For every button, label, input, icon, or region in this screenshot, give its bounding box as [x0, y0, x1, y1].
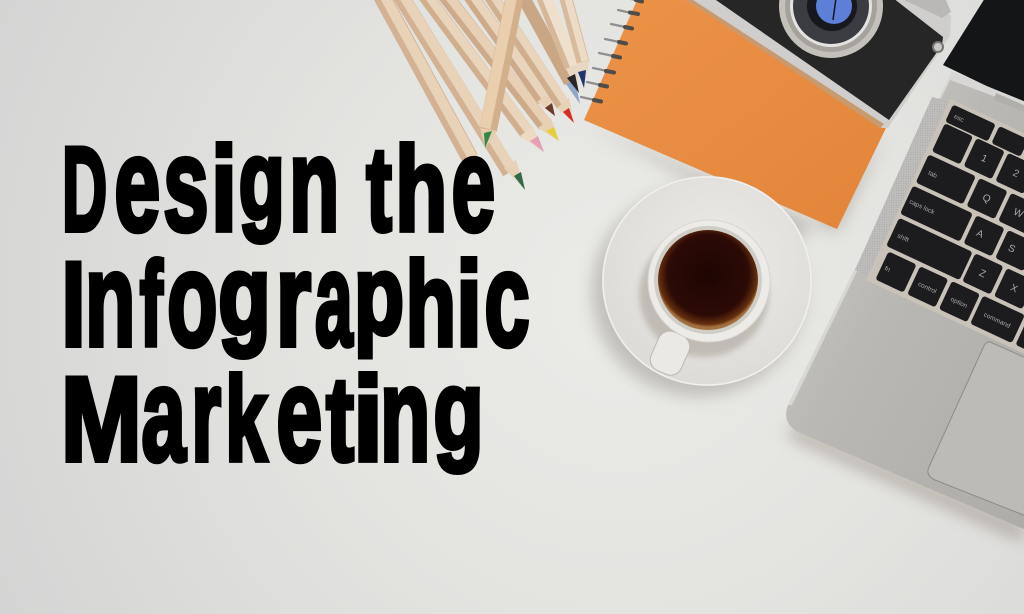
title line 2: f: [140, 238, 163, 372]
camera top controls: [900, 0, 951, 18]
laptop: [786, 0, 1024, 540]
pencil: dark green: [400, 0, 525, 190]
pencil: black: [543, 0, 579, 93]
trackpad: [928, 342, 1024, 516]
laptop screen: [943, 0, 1024, 105]
title line 2: c: [484, 226, 530, 374]
title line 2: i: [456, 238, 482, 372]
title line 2: I: [62, 238, 86, 372]
key row: shift: [886, 218, 1024, 324]
key labels: 2: [1011, 168, 1021, 180]
camera lens: [779, 0, 883, 58]
title line 3: i: [353, 352, 383, 486]
camera leather panel: [713, 0, 943, 120]
pencil: light blue: [522, 0, 580, 104]
title line 2: p: [354, 233, 404, 358]
title line 2: h: [406, 238, 456, 372]
key labels: fn: [883, 265, 891, 274]
speaker grille: [855, 97, 948, 277]
camera body: [683, 0, 951, 128]
keyboard: [866, 99, 1024, 391]
title line 1: s: [163, 110, 209, 260]
title line 2: n: [85, 226, 136, 374]
camera strap lug: [933, 42, 943, 52]
title line 1: t: [366, 122, 392, 256]
key labels: Z: [977, 268, 987, 280]
title line 3: a: [141, 340, 187, 490]
title line 1: g: [239, 118, 285, 243]
coffee cup and saucer: [592, 176, 812, 396]
key labels: caps lock: [908, 198, 936, 217]
notebook spiral binding: [581, 0, 642, 102]
pencil: yellow: [445, 0, 559, 141]
title line 1: h: [395, 122, 447, 256]
key row: caps lock: [900, 186, 1024, 286]
key row: tab: [916, 154, 1024, 249]
laptop base: [786, 72, 1024, 530]
camera: [683, 0, 951, 128]
title line 3: M: [61, 352, 142, 486]
cup: [648, 220, 770, 342]
title line 3: k: [225, 352, 267, 486]
pencil: plain: [381, 0, 473, 158]
pencil: navy: [565, 0, 590, 88]
key labels: esc: [953, 113, 965, 124]
key labels: [878, 111, 1024, 330]
key labels: Q: [981, 192, 992, 206]
key labels: A: [974, 228, 985, 241]
title line 1: e: [452, 110, 495, 260]
pencil: red: [490, 0, 574, 123]
title line 2: g: [218, 233, 271, 358]
title line 3: e: [276, 340, 322, 490]
title line 3: r: [191, 340, 221, 490]
key labels: X: [1009, 283, 1020, 295]
title line 3: g: [434, 348, 484, 473]
title line 3: n: [380, 340, 430, 490]
key labels: option: [949, 296, 969, 310]
title line 2: o: [167, 226, 218, 374]
title line 1: e: [114, 110, 160, 260]
key row: numbers: [932, 123, 1024, 209]
title line 2: r: [276, 226, 311, 374]
title: [61, 110, 530, 490]
hinge: [994, 93, 1024, 112]
pencil: brown: [470, 0, 555, 116]
colored pencils: [381, 0, 590, 190]
key row: fn: [875, 251, 1024, 387]
notebook: [581, 0, 886, 240]
key labels: 1: [979, 153, 989, 165]
key labels: command: [982, 311, 1012, 330]
title line 2: a: [315, 226, 353, 374]
title line 1: i: [211, 122, 237, 256]
pencil: top green: [480, 0, 515, 148]
pencil: pink: [425, 0, 544, 152]
key row: function: [945, 104, 1024, 172]
title line 1: D: [62, 122, 107, 256]
title line 1: n: [289, 110, 340, 260]
title line 3: t: [326, 352, 354, 486]
saucer: [602, 176, 812, 386]
key labels: S: [1006, 243, 1017, 256]
key labels: tab: [927, 170, 938, 180]
coffee: [658, 230, 758, 330]
key labels: shift: [896, 233, 910, 244]
key labels: control: [917, 281, 938, 296]
cup handle: [646, 327, 694, 379]
